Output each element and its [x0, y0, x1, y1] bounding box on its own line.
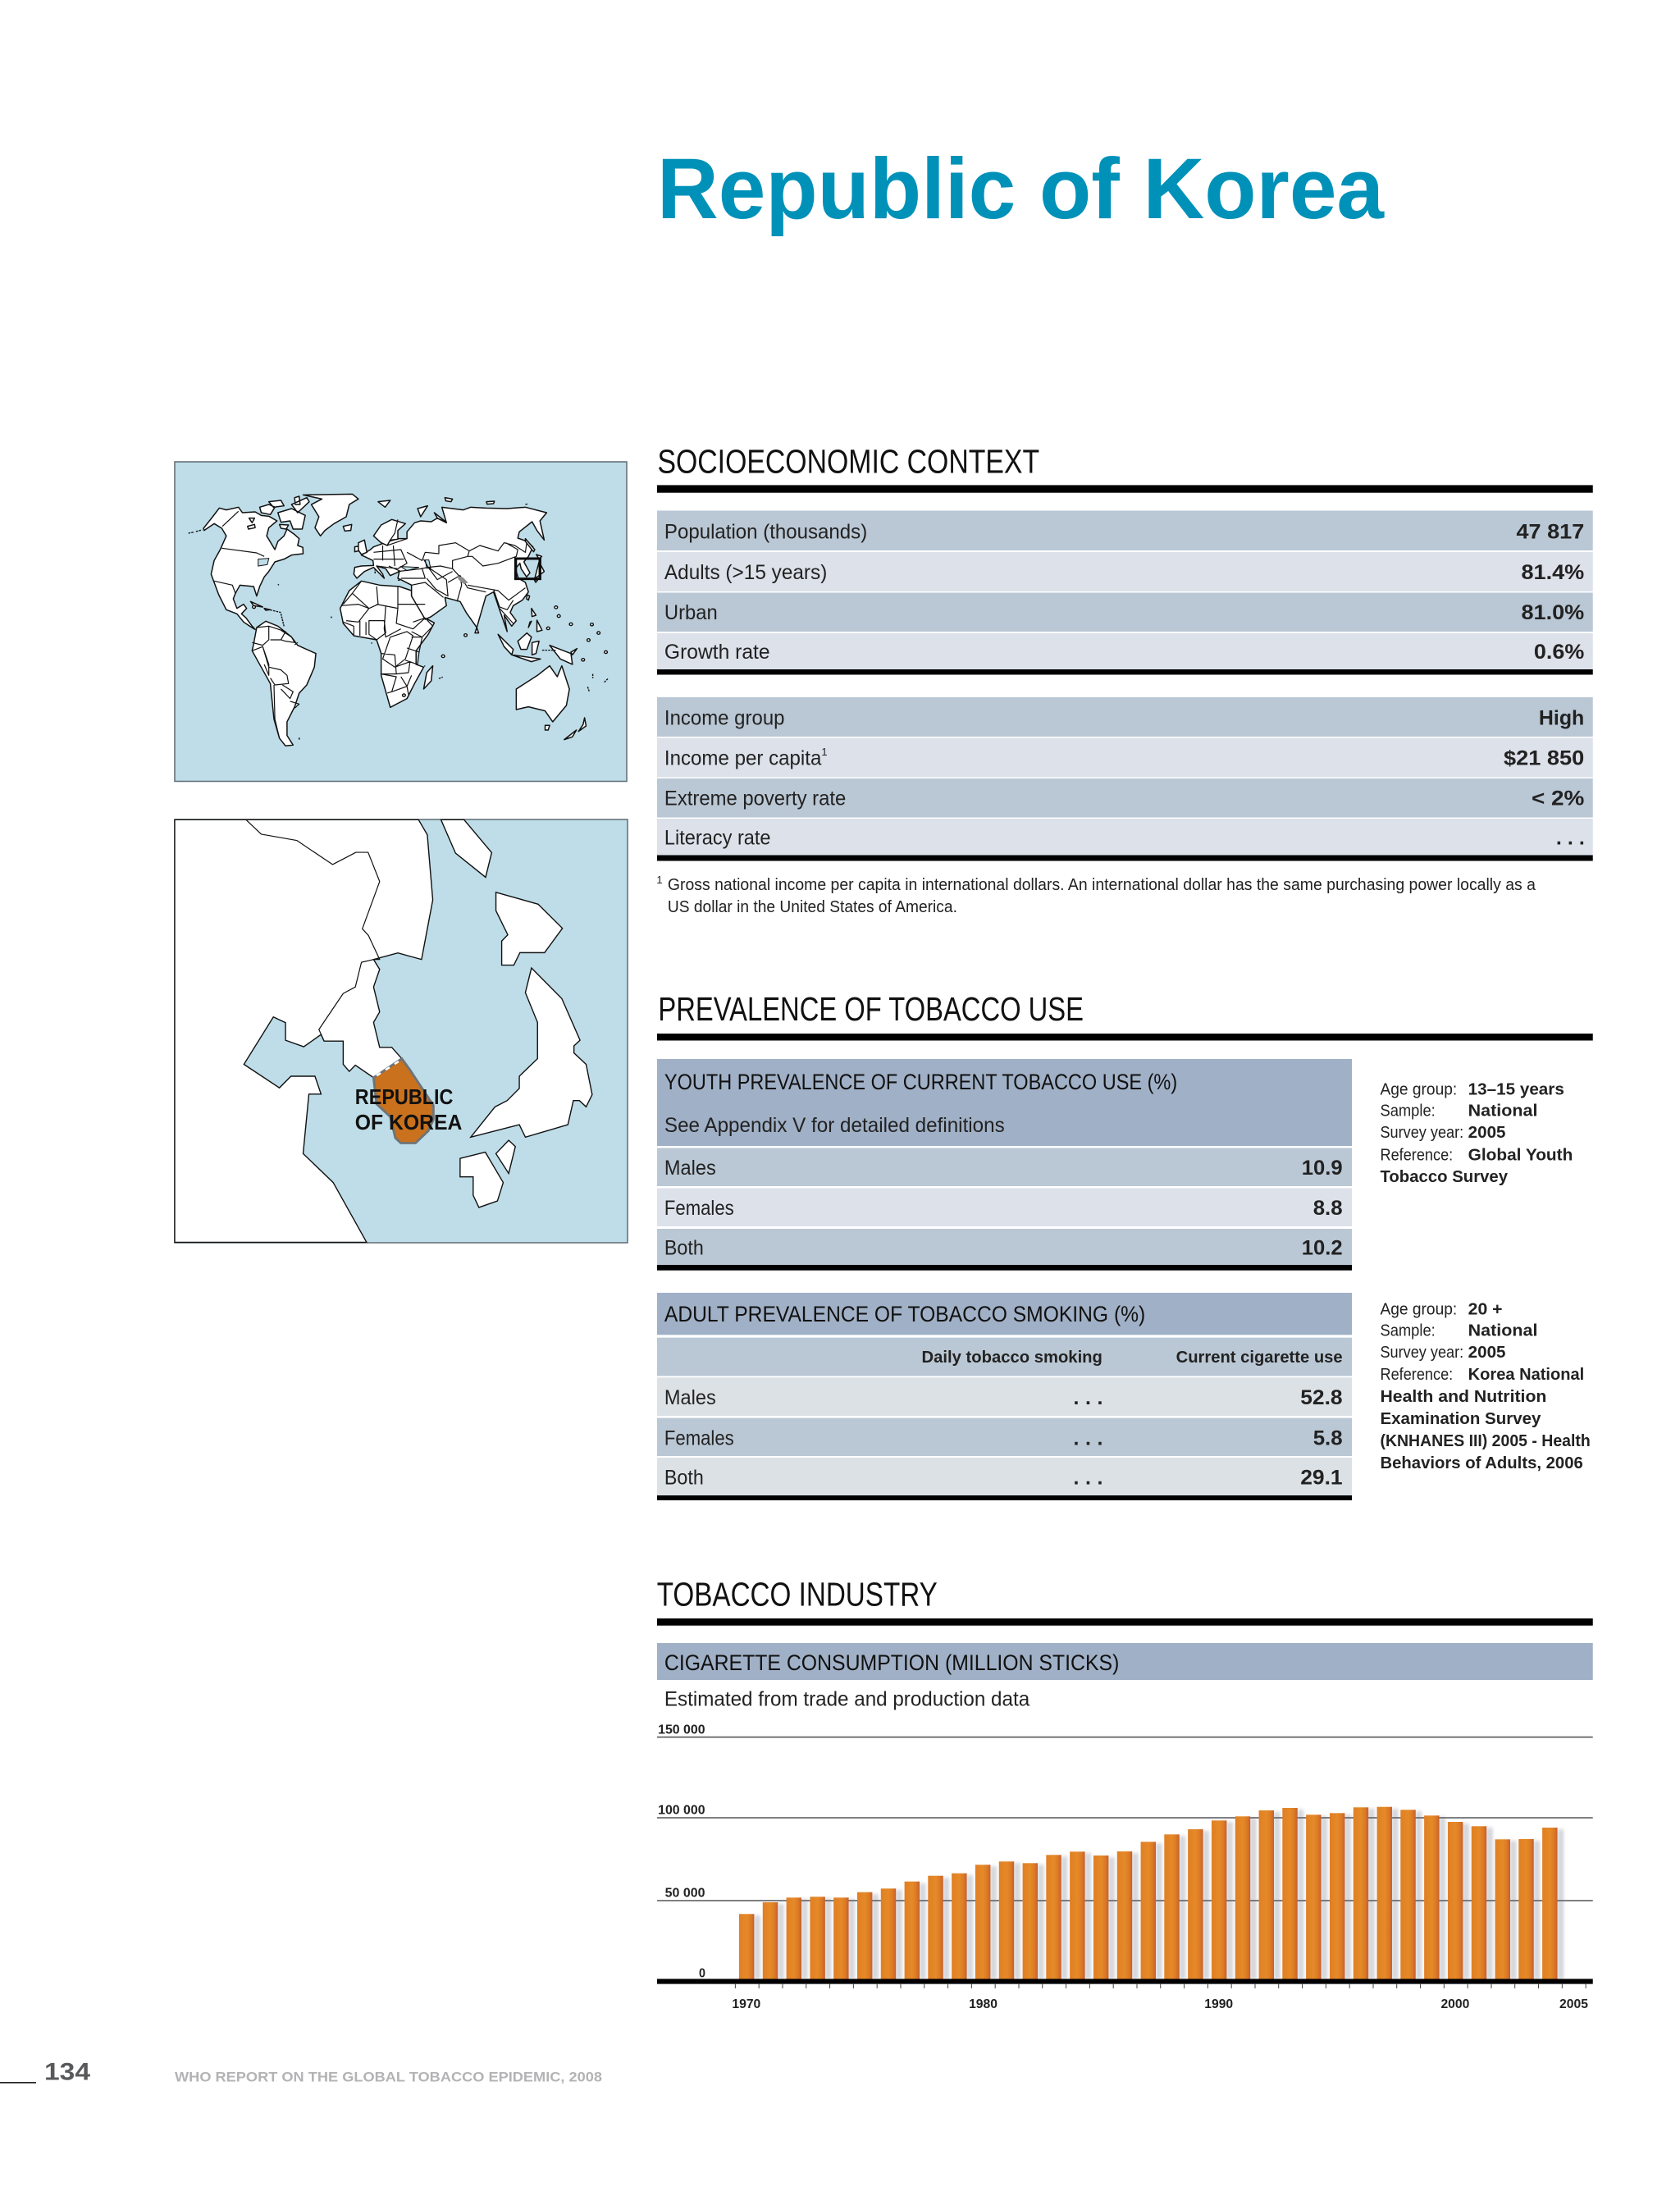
year labels: [732, 1997, 1588, 2011]
year labels: 2005: [1559, 1997, 1588, 2011]
Canadian Arctic islands: [248, 496, 309, 529]
table: population: 0.6%: [1534, 641, 1584, 664]
Republic of Korea territory: [373, 1059, 433, 1143]
table: income: Extreme poverty rate: [664, 787, 846, 810]
page footer: [0, 2059, 602, 2086]
table: youth prevalence: Males: [664, 1157, 716, 1180]
adult survey notes: Examination Survey: [1380, 1410, 1541, 1428]
youth survey notes: 2005: [1468, 1124, 1506, 1142]
table: income: Income group: [664, 706, 785, 730]
heading: SOCIOECONOMIC CONTEXT: [657, 442, 1039, 481]
youth survey notes: National: [1468, 1102, 1537, 1121]
gridlines: [657, 1737, 1593, 1901]
locator box: [516, 559, 540, 579]
youth survey notes: [1380, 1080, 1573, 1186]
table: adult prevalence: [657, 1293, 1352, 1500]
chart header: [657, 1643, 1593, 1711]
table: population: Population (thousands): [664, 520, 867, 544]
section: prevalence of tobacco use: [657, 990, 1593, 1500]
table: adult prevalence: Females: [664, 1426, 734, 1449]
adult survey notes: National: [1468, 1321, 1537, 1340]
footnote: US dollar in the United States of America.: [668, 898, 957, 916]
adult survey notes: Reference:: [1380, 1366, 1453, 1384]
table: adult prevalence: ...: [1074, 1386, 1102, 1409]
table: population: 81.0%: [1521, 601, 1584, 624]
table: adult prevalence: ADULT PREVALENCE OF TOBACCO SMOKING (%): [664, 1302, 1145, 1326]
table: adult prevalence: 52.8: [1300, 1386, 1343, 1409]
South America: [252, 621, 316, 746]
youth survey notes: Reference:: [1380, 1146, 1453, 1164]
country label: REPUBLIC: [355, 1084, 454, 1109]
year labels: 1990: [1204, 1997, 1233, 2011]
axis labels: 50 000: [665, 1887, 705, 1901]
Eurasia: [354, 507, 546, 632]
chart header: Estimated from trade and production data: [664, 1687, 1029, 1711]
table: population: Urban: [664, 601, 718, 624]
youth survey notes: Age group:: [1380, 1080, 1457, 1099]
bars: [739, 1807, 1558, 1979]
chart header: CIGARETTE CONSUMPTION (MILLION STICKS): [664, 1650, 1119, 1675]
adult survey notes: (KNHANES III) 2005 - Health: [1380, 1432, 1591, 1450]
table: adult prevalence: 5.8: [1313, 1426, 1343, 1449]
title: Republic of Korea: [657, 141, 1386, 237]
table: adult prevalence: Both: [664, 1466, 704, 1490]
adult survey notes: Health and Nutrition: [1380, 1388, 1546, 1406]
table: youth prevalence: See Appendix V for detailed definitions: [664, 1114, 1005, 1137]
table: youth prevalence: 10.2: [1302, 1236, 1343, 1260]
table: income: Income per capita: [664, 746, 821, 770]
adult survey notes: 2005: [1468, 1344, 1506, 1362]
section: socioeconomic context: [656, 442, 1593, 916]
adult survey notes: 20 +: [1468, 1300, 1503, 1319]
table: income: 1: [821, 746, 828, 758]
youth survey notes: Sample:: [1380, 1102, 1436, 1121]
table: youth prevalence: 10.9: [1302, 1157, 1343, 1180]
table: youth prevalence: 8.8: [1313, 1197, 1343, 1220]
islands: [250, 498, 586, 740]
section: tobacco industry: [657, 1575, 1593, 2011]
table: population: Growth rate: [664, 641, 770, 664]
country label: [355, 1084, 463, 1134]
youth survey notes: Global Youth: [1468, 1146, 1573, 1164]
country borders: [214, 511, 433, 695]
mainland: [175, 819, 433, 1242]
year labels: 1980: [969, 1997, 998, 2011]
Kyushu: [460, 1153, 503, 1207]
table: population: Adults (>15 years): [664, 561, 827, 584]
country label: OF KOREA: [355, 1110, 463, 1134]
bar shadows: [754, 1809, 1564, 1979]
adult survey notes: Survey year:: [1380, 1344, 1463, 1362]
heading: PREVALENCE OF TOBACCO USE: [658, 990, 1084, 1028]
adult survey notes: Behaviors of Adults, 2006: [1380, 1454, 1583, 1472]
borders: [246, 819, 380, 1041]
table: adult prevalence: 29.1: [1300, 1466, 1343, 1490]
youth survey notes: 13–15 years: [1468, 1080, 1564, 1099]
adult survey notes: Age group:: [1380, 1300, 1457, 1319]
disputed area: [457, 576, 468, 584]
Honshu: [471, 968, 592, 1137]
youth survey notes: Tobacco Survey: [1380, 1168, 1508, 1186]
Greenland: [304, 494, 358, 536]
axis labels: 0: [699, 1967, 705, 1981]
table: adult prevalence: Current cigarette use: [1176, 1349, 1343, 1367]
table: adult prevalence: Daily tobacco smoking: [922, 1349, 1102, 1367]
table: youth prevalence: Females: [664, 1197, 734, 1220]
footnote: [656, 874, 1536, 916]
youth survey notes: Survey year:: [1380, 1124, 1463, 1142]
axis labels: [658, 1723, 705, 1981]
table: income: ...: [1556, 826, 1585, 850]
Hokkaido: [496, 892, 563, 965]
Sakhalin: [441, 819, 491, 877]
table: youth prevalence: YOUTH PREVALENCE OF CURRENT TOBACCO USE (%): [664, 1070, 1177, 1094]
North America: [203, 507, 304, 629]
adult survey notes: Korea National: [1468, 1366, 1584, 1384]
table: income: High: [1539, 706, 1584, 730]
year labels: 1970: [732, 1997, 760, 2011]
table: youth prevalence: Both: [664, 1236, 704, 1260]
table: youth prevalence: [657, 1059, 1352, 1271]
table: population: 47 817: [1516, 520, 1584, 544]
Africa: [340, 581, 434, 707]
table: income: < 2%: [1532, 787, 1584, 810]
Shikoku: [496, 1140, 515, 1174]
table: population: [657, 510, 1593, 674]
world map panel: [175, 462, 627, 781]
inland seas: [258, 559, 431, 571]
footnote: Gross national income per capita in international dollars. An international dollar has the same purchasing power locally as a: [668, 876, 1536, 894]
footnote: 1: [656, 874, 663, 886]
axis labels: 150 000: [658, 1723, 705, 1737]
heading: TOBACCO INDUSTRY: [657, 1575, 938, 1614]
page footer: 134: [44, 2059, 90, 2086]
x axis: [657, 1979, 1593, 1984]
table: adult prevalence: ...: [1074, 1466, 1102, 1490]
axis labels: 100 000: [658, 1804, 705, 1818]
table: adult prevalence: Males: [664, 1386, 716, 1409]
table: adult prevalence: ...: [1074, 1426, 1102, 1449]
table: income: [657, 697, 1593, 861]
regional map panel: [175, 819, 628, 1243]
Scandinavia: [373, 519, 405, 545]
bar chart: cigarette consumption: [657, 1723, 1593, 2011]
table: income: Literacy rate: [664, 826, 771, 850]
table: population: 81.4%: [1521, 561, 1584, 584]
adult survey notes: Sample:: [1380, 1321, 1436, 1340]
page footer: WHO REPORT ON THE GLOBAL TOBACCO EPIDEMIC, 2008: [175, 2069, 602, 2084]
year labels: 2000: [1440, 1997, 1469, 2011]
adult survey notes: [1380, 1300, 1591, 1472]
table: income: $21 850: [1504, 746, 1584, 770]
